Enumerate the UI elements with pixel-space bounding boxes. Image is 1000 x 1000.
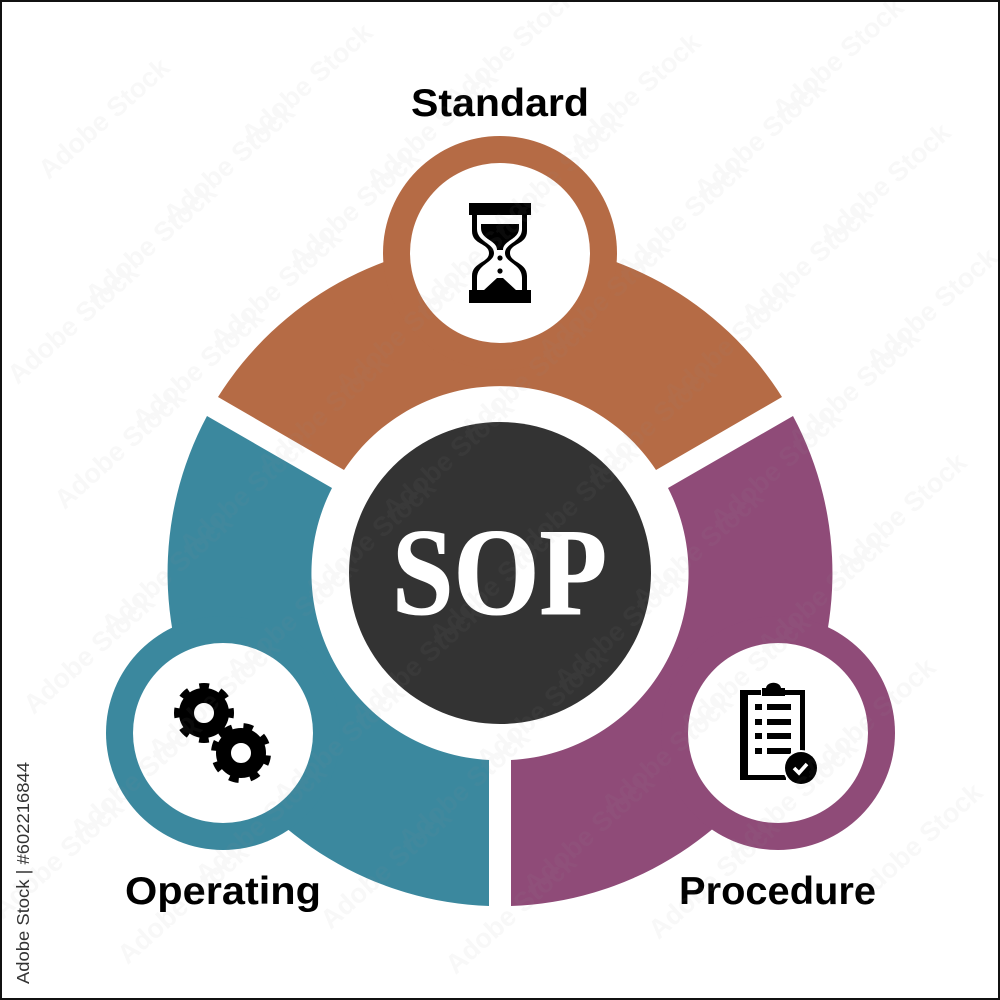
watermark pattern: Adobe Stock [783,321,926,455]
label: Standard: Standard [411,82,589,125]
watermark pattern: Adobe Stock [49,381,192,515]
watermark pattern: Adobe Stock [80,176,223,310]
watermark pattern: Adobe Stock [65,711,208,845]
segment: Standard (orange) with icon badge [218,136,782,470]
watermark pattern: Adobe Stock [174,426,317,560]
watermark pattern: Adobe Stock [533,231,676,365]
watermark pattern: Adobe Stock [674,606,817,740]
watermark pattern: Adobe Stock [846,776,989,910]
watermark pattern: Adobe Stock [221,551,364,685]
watermark pattern: Adobe Stock [236,16,379,150]
label: Operating: Operating [125,870,321,913]
watermark pattern: Adobe Stock [2,256,145,390]
watermark pattern: Adobe Stock [580,356,723,490]
center title: SOP: SOP [392,504,607,641]
watermark pattern: Adobe Stock [455,311,598,445]
watermark pattern: Adobe Stock [440,846,583,980]
watermark pattern: Adobe Stock [627,481,770,615]
watermark pattern: Adobe Stock [814,116,957,250]
watermark pattern: Adobe Stock [158,96,301,230]
watermark pattern: Adobe Stock [502,436,645,570]
watermark pattern: Adobe Stock [268,676,411,810]
watermark pattern: Adobe Stock [799,651,942,785]
watermark pattern: Adobe Stock [689,71,832,205]
watermark pattern: Adobe Stock [658,276,801,410]
segment: Operating (teal) with icon badge [106,416,489,906]
watermark pattern: Adobe Stock [18,586,161,720]
icon: hourglass [469,203,531,303]
watermark pattern: Adobe Stock [283,141,426,275]
watermark pattern: Adobe Stock [377,391,520,525]
watermark pattern: Adobe Stock [752,526,895,660]
watermark pattern: Adobe Stock [252,346,395,480]
watermark pattern: Adobe Stock [643,811,786,945]
watermark pattern: Adobe Stock [596,686,739,820]
watermark pattern: Adobe Stock [143,631,286,765]
watermark pattern: Adobe Stock [346,596,489,730]
watermark pattern: Adobe Stock [190,756,333,890]
watermark pattern: Adobe Stock [393,721,536,855]
watermark pattern: Adobe Stock [33,51,176,185]
watermark pattern: Adobe Stock [299,471,442,605]
watermark pattern: Adobe Stock [127,301,270,435]
icon: gears [178,686,273,785]
watermark pattern: Adobe Stock [705,401,848,535]
watermark pattern: Adobe Stock [315,801,458,935]
watermark pattern: Adobe Stock [486,106,629,240]
segment: Procedure (purple) with icon badge [511,416,895,906]
watermark pattern: Adobe Stock [361,61,504,195]
watermark pattern: Adobe Stock [471,641,614,775]
watermark pattern: Adobe Stock [518,766,661,900]
watermark pattern: Adobe Stock [424,516,567,650]
watermark pattern: Adobe Stock [861,241,1000,375]
watermark pattern: Adobe Stock [205,221,348,355]
stock credit text (vertical): Adobe Stock | #602216844 [13,762,33,984]
watermark pattern: Adobe Stock [96,506,239,640]
watermark pattern: Adobe Stock [112,836,255,970]
watermark pattern: Adobe Stock [721,731,864,865]
label: Procedure: Procedure [679,870,876,913]
watermark pattern: Adobe Stock [408,186,551,320]
icon: clipboard with checkmark [740,683,819,786]
watermark pattern: Adobe Stock [736,196,879,330]
watermark pattern: Adobe Stock [564,26,707,160]
watermark pattern: Adobe Stock [549,561,692,695]
center circle [349,422,651,724]
watermark pattern: Adobe Stock [830,446,973,580]
watermark pattern: Adobe Stock [330,266,473,400]
watermark pattern: Adobe Stock [611,151,754,285]
